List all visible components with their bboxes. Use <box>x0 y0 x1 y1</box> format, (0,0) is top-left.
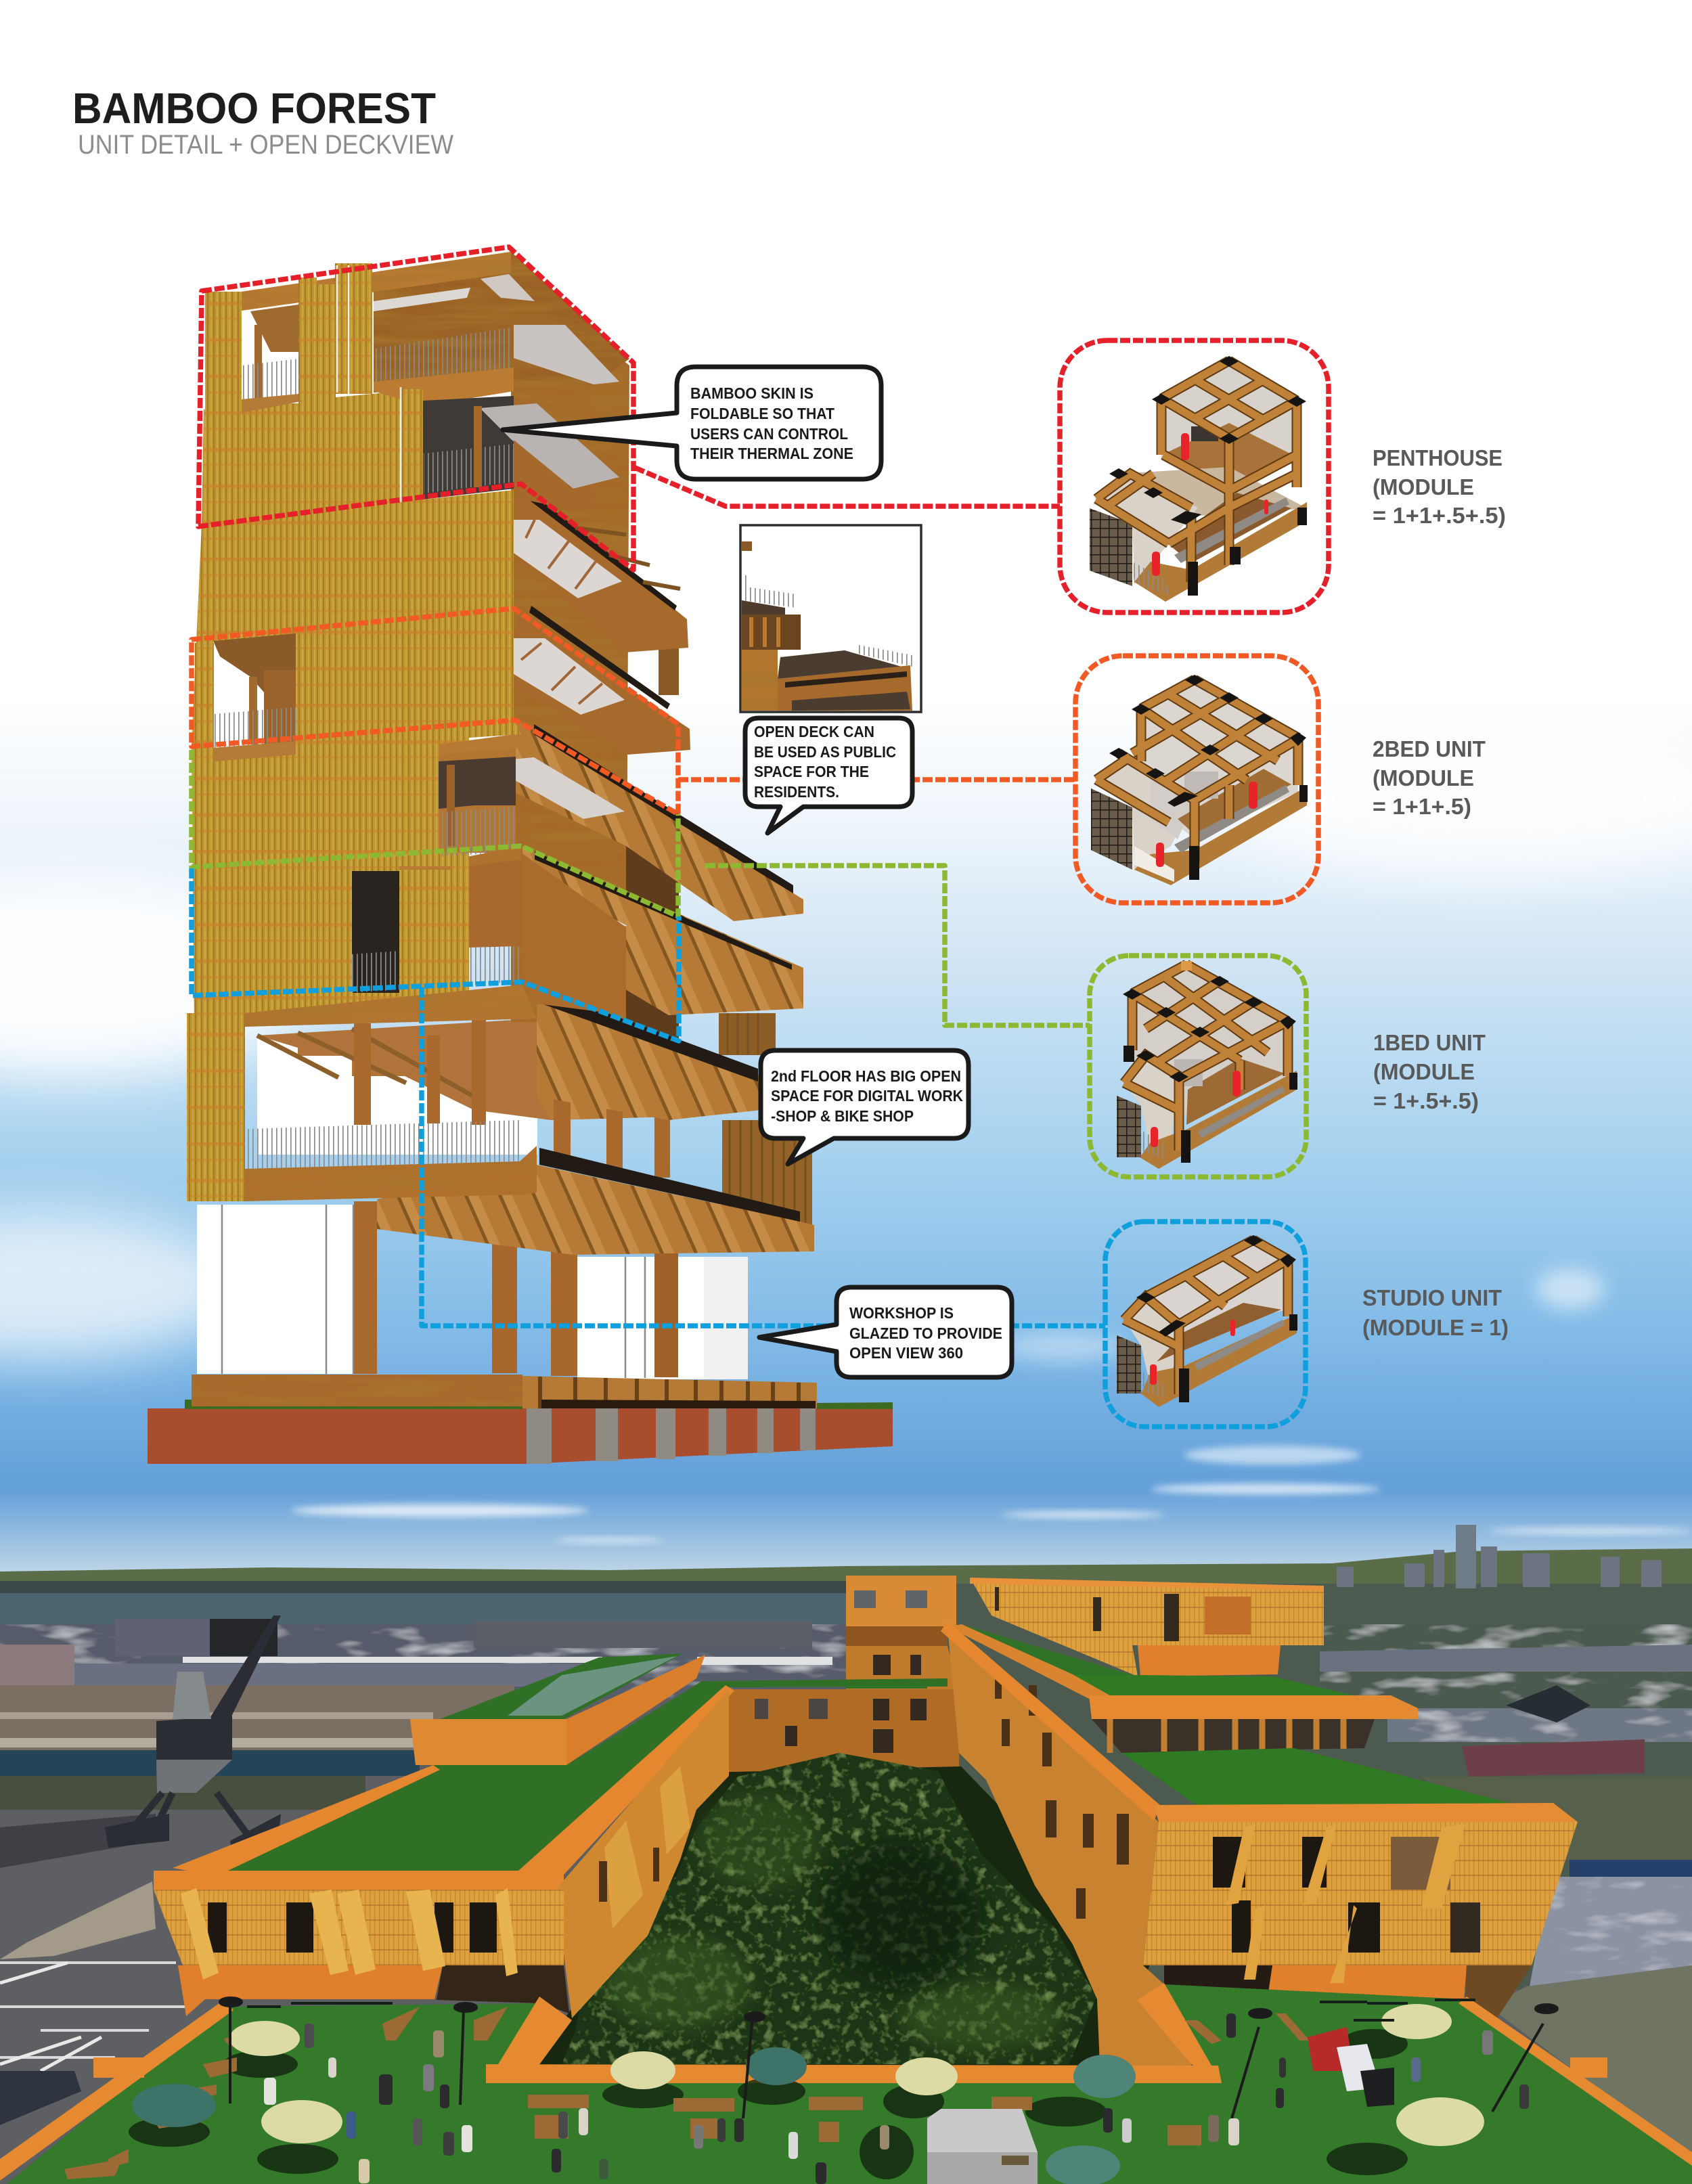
deck 2 <box>514 606 690 755</box>
right city landscape <box>846 1525 1692 2159</box>
right wing parapet <box>941 1621 1161 1821</box>
callout: bamboo skin: FOLDABLE SO THAT <box>690 405 834 422</box>
third floor slab beam <box>245 985 537 1027</box>
2bed label: (MODULE <box>1373 765 1474 790</box>
panel: studio unit <box>1105 1222 1509 1427</box>
penthouse label: = 1+1+.5+.5) <box>1373 503 1506 528</box>
foundation slab <box>148 1398 893 1464</box>
near right green roof <box>1121 1748 1510 1805</box>
umbrellas <box>132 2004 1484 2184</box>
studio label: (MODULE = 1) <box>1362 1315 1509 1340</box>
deck 4 <box>483 846 803 1015</box>
food truck trailer <box>927 2109 1038 2184</box>
shadows on lawn <box>129 2029 1408 2179</box>
penthouse isometric model <box>1090 356 1307 602</box>
dashed module outlines on tower <box>192 247 679 1041</box>
orange leader <box>678 777 1075 782</box>
crane <box>105 1615 281 1861</box>
vending machines <box>1308 2027 1394 2107</box>
picnic tables and benches <box>64 2007 1310 2179</box>
1bed outline <box>192 750 678 916</box>
lawn parapets <box>0 1983 1692 2181</box>
blue leader <box>422 987 1105 1326</box>
callout: workshop: WORKSHOP IS <box>849 1304 954 1322</box>
left wing side wall <box>556 1689 729 2018</box>
callout: open deck: SPACE FOR THE <box>754 763 869 780</box>
structural columns <box>354 1020 678 1377</box>
tower section model <box>148 252 893 1464</box>
bamboo facade <box>192 389 521 1026</box>
penthouse outline <box>198 247 633 570</box>
far building block <box>846 1576 959 1689</box>
callout: second floor: SPACE FOR DIGITAL WORK <box>771 1087 963 1105</box>
callout: second floor <box>761 1050 969 1164</box>
studio outline <box>192 868 679 1041</box>
green leader <box>705 866 1090 1025</box>
second floor open space <box>257 1019 669 1155</box>
lower black deck strip <box>539 1148 800 1222</box>
pergola slab and posts <box>1089 1695 1418 1753</box>
2bed label: = 1+1+.5) <box>1373 794 1471 819</box>
aerial scene: open deck view <box>0 1525 1692 2184</box>
penthouse label: PENTHOUSE <box>1373 445 1502 470</box>
2bed isometric model <box>1091 675 1308 885</box>
deck 1 <box>514 484 688 652</box>
near right windows <box>1213 1824 1480 1983</box>
2bed label <box>1373 736 1486 819</box>
right lower mass <box>626 799 679 1083</box>
left wing parapets <box>154 1685 734 1890</box>
2bed outline <box>192 608 678 814</box>
lamp posts <box>220 1998 1557 2118</box>
far bamboo screens <box>719 1013 812 1251</box>
panel: 2bed unit <box>1075 656 1486 903</box>
balcony rail level 2 <box>248 1120 520 1169</box>
red leader <box>635 468 1060 506</box>
folding bamboo panels top <box>205 263 423 502</box>
callout: bamboo skin: THEIR THERMAL ZONE <box>690 445 853 462</box>
1bed label: (MODULE <box>1373 1059 1475 1084</box>
callout: open deck: OPEN DECK CAN <box>754 723 874 740</box>
callout: workshop <box>759 1287 1012 1377</box>
studio label <box>1362 1285 1509 1340</box>
right wing side windows <box>995 1672 1129 1919</box>
callout: second floor: -SHOP & BIKE SHOP <box>771 1107 914 1125</box>
penthouse structure <box>242 252 629 514</box>
callout: workshop: OPEN VIEW 360 <box>849 1344 963 1362</box>
floor deck 5 underside <box>377 1165 814 1255</box>
2bed label: 2BED UNIT <box>1373 736 1486 761</box>
lawn deck <box>7 1984 1692 2184</box>
left wing green roof <box>216 1678 948 1871</box>
deck 3 <box>483 719 803 921</box>
callout: second floor: 2nd FLOOR HAS BIG OPEN <box>771 1067 961 1085</box>
inset deck model <box>742 541 912 711</box>
ground floor glazing <box>197 1205 748 1379</box>
courtyard back wall <box>729 1680 959 1774</box>
window unit 2bed <box>195 633 314 762</box>
callout: open deck <box>745 718 912 833</box>
background sky <box>0 0 1692 1584</box>
balcony room level 1bed <box>420 734 521 893</box>
bike racks <box>247 2000 1475 2020</box>
title <box>72 84 453 160</box>
people on lawn <box>264 2013 1529 2184</box>
wood base platform <box>192 1375 817 1408</box>
distant hills and water <box>0 1548 1692 1624</box>
right wood mass <box>511 271 629 1022</box>
left wing front facade <box>154 1888 569 2016</box>
panel: 1bed unit <box>1090 956 1486 1177</box>
callout: workshop: GLAZED TO PROVIDE <box>849 1324 1002 1342</box>
inset: open deck view <box>740 525 921 712</box>
1bed label: 1BED UNIT <box>1373 1030 1486 1055</box>
deck 5 <box>536 987 761 1120</box>
left bamboo column <box>187 1013 245 1201</box>
1bed isometric model <box>1117 961 1297 1169</box>
door unit studio <box>335 853 626 1015</box>
studio isometric model <box>1117 1235 1297 1407</box>
near right parapet <box>1154 1803 1578 1822</box>
callout: bamboo skin <box>503 367 881 479</box>
right wing side wall <box>948 1628 1191 2066</box>
title: BAMBOO FOREST <box>72 84 436 133</box>
studio label: STUDIO UNIT <box>1362 1285 1502 1310</box>
callout: bamboo skin: USERS CAN CONTROL <box>690 425 848 443</box>
strip roof between wings <box>948 1624 1137 1699</box>
1bed label: = 1+.5+.5) <box>1373 1088 1479 1113</box>
penthouse window <box>242 305 305 413</box>
leader lines to unit boxes <box>422 468 1105 1326</box>
callout: open deck: RESIDENTS. <box>754 783 839 801</box>
courtyard dark floor <box>528 1766 1151 2071</box>
near right bamboo facade <box>1143 1822 1578 2020</box>
callout: bamboo skin: BAMBOO SKIN IS <box>690 384 814 402</box>
penthouse label <box>1373 445 1506 528</box>
top bar building <box>962 1578 1324 1676</box>
floor beam lower <box>245 1146 537 1201</box>
title: UNIT DETAIL + OPEN DECKVIEW <box>78 130 453 160</box>
panel: penthouse unit <box>1060 340 1506 612</box>
court trees <box>562 1753 1096 2064</box>
mid roof green <box>1073 1674 1354 1695</box>
penthouse label: (MODULE <box>1373 474 1474 499</box>
far column <box>659 648 679 695</box>
left wing upper box and roof <box>410 1653 705 1765</box>
1bed label <box>1373 1030 1486 1113</box>
left industrial ground <box>0 1619 846 2125</box>
callout: open deck: BE USED AS PUBLIC <box>754 743 896 761</box>
scene ground base <box>284 1699 1570 2068</box>
